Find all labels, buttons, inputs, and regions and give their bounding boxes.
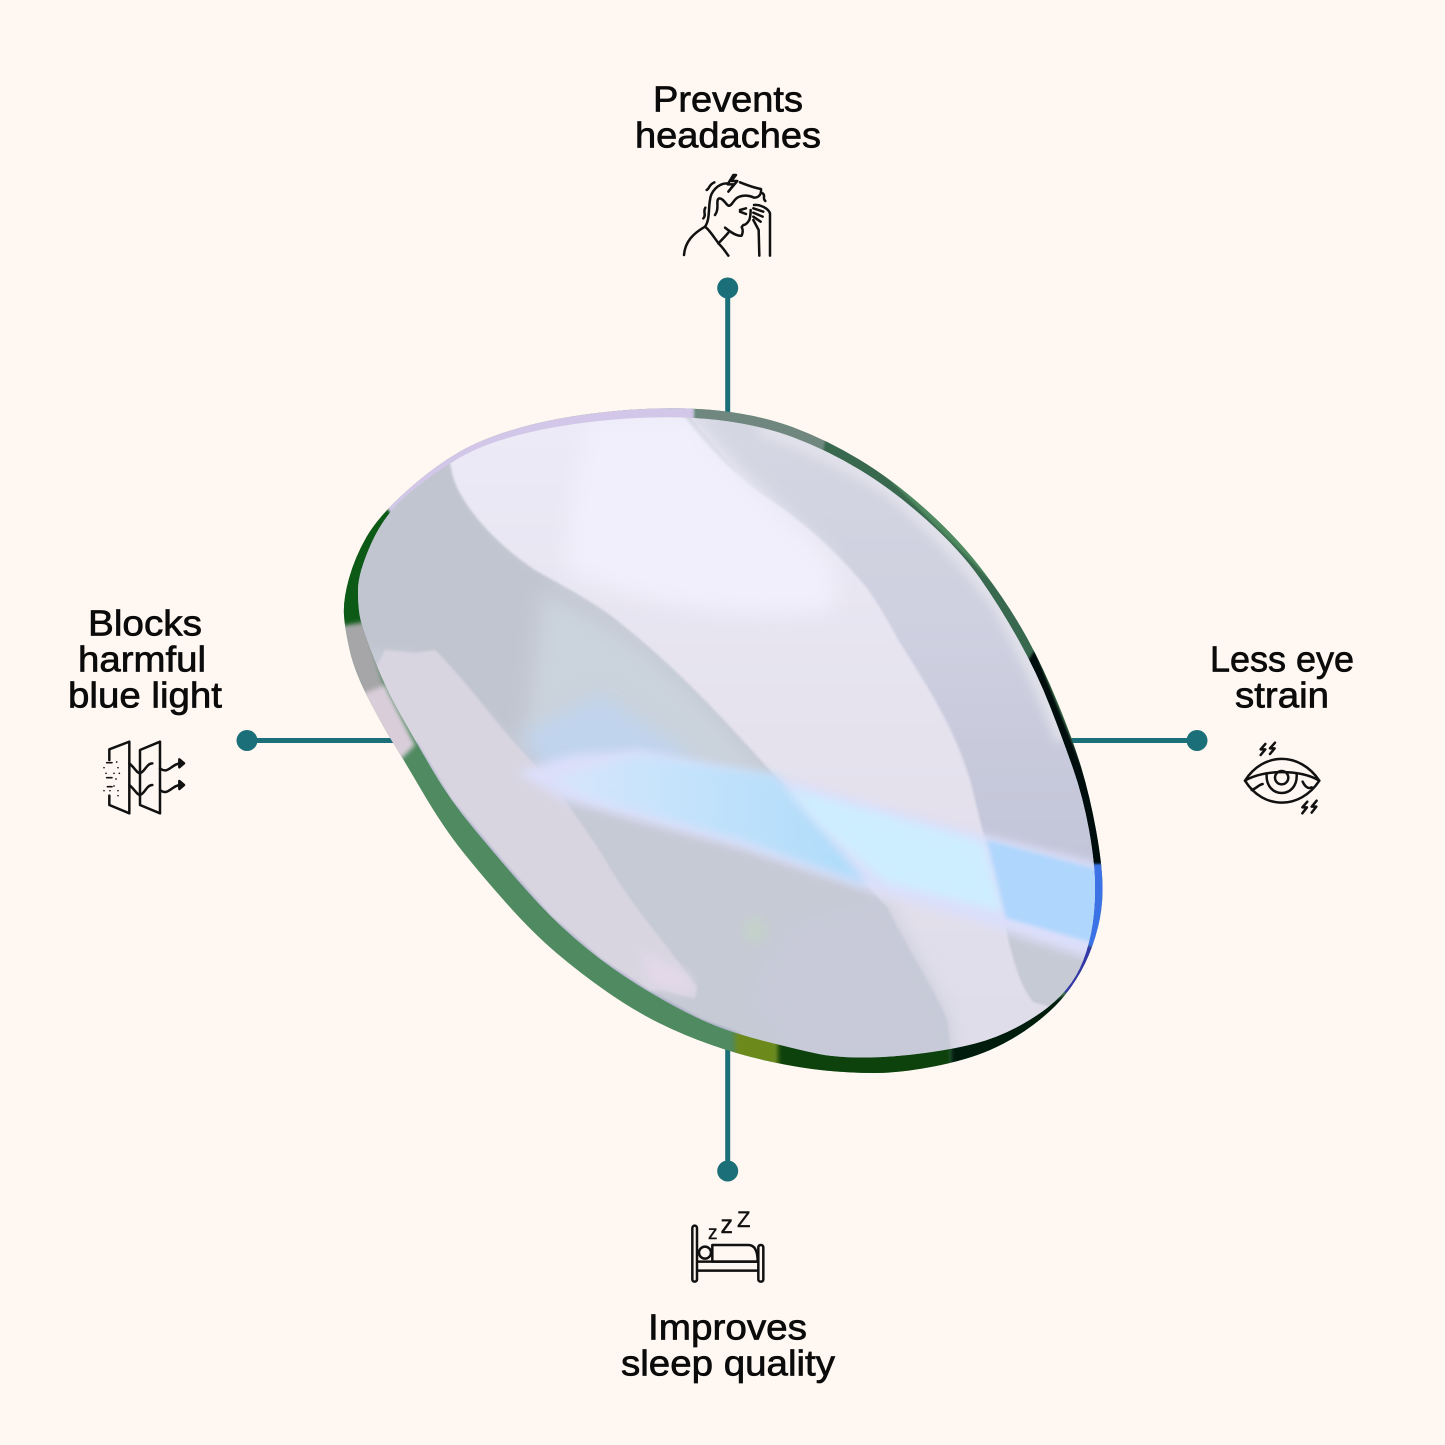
heading: blocks harmful blue light [68, 602, 222, 716]
heading: improves sleep quality [621, 1306, 835, 1384]
connector: top [717, 278, 738, 420]
connector: bottom [717, 1040, 738, 1182]
lens rim [320, 390, 1120, 1090]
heading: prevents headaches [635, 78, 821, 156]
callout: improves sleep quality [621, 1040, 835, 1384]
callout: less eye strain [1060, 638, 1354, 813]
lens edge lines [415, 742, 740, 1035]
left shaded area [358, 512, 390, 646]
connector: left [236, 730, 400, 751]
icon: person sleeping in bed [692, 1207, 763, 1282]
infographic canvas [70, 86, 1353, 1384]
lens [320, 390, 1120, 1090]
icon: light filter panels [104, 742, 184, 813]
callout: blocks harmful blue light [68, 602, 400, 813]
heading: prevents headaches: headaches [635, 114, 821, 156]
left light band [370, 650, 697, 1000]
connector: right [1060, 730, 1208, 751]
icon: man with headache [684, 175, 770, 256]
main light band [440, 410, 1060, 1060]
heading: blocks harmful blue light: Blocks [88, 602, 202, 644]
lower middle shading [775, 903, 954, 1058]
heading: improves sleep quality: sleep quality [621, 1342, 835, 1384]
icon: person sleeping in bed: z [720, 1211, 733, 1239]
heading: blocks harmful blue light: harmful [78, 638, 206, 680]
heading: improves sleep quality: Improves [648, 1306, 807, 1348]
callout: prevents headaches [635, 78, 821, 420]
icon: person sleeping in bed: z [708, 1223, 718, 1244]
heading: blocks harmful blue light: blue light [68, 674, 222, 716]
lens face [358, 417, 1095, 1058]
blue light reflection [517, 750, 1100, 962]
heading: less eye strain: strain [1235, 674, 1329, 716]
right shaded area [692, 418, 1094, 870]
heading: less eye strain [1210, 638, 1354, 716]
icon: strained eye [1245, 743, 1319, 813]
icon: person sleeping in bed: Z [737, 1207, 750, 1232]
heading: less eye strain: Less eye [1210, 638, 1354, 680]
brightest highlight [580, 418, 826, 604]
soft middle band [530, 600, 726, 756]
heading: prevents headaches: Prevents [653, 78, 803, 120]
